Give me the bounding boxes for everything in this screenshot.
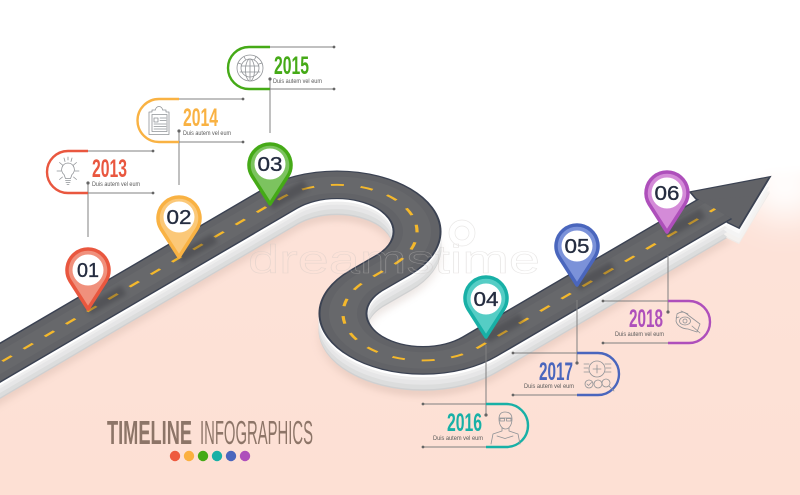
road ground shadow bbox=[0, 208, 715, 409]
label 2013: 2013 bbox=[92, 155, 127, 183]
label 2014 bbox=[138, 98, 244, 185]
icon: light bulb bbox=[57, 157, 79, 184]
pin 05: 05 bbox=[564, 236, 590, 258]
pin 03: 03 bbox=[258, 154, 282, 176]
watermark: dreamstime bbox=[248, 238, 540, 282]
pin 01: 01 bbox=[77, 260, 99, 282]
pin 04: 04 bbox=[474, 289, 498, 311]
label 2016: Duis autem vel eum bbox=[433, 436, 483, 442]
label 2018 bbox=[602, 255, 710, 344]
colour dots row bbox=[170, 451, 250, 461]
label 2013 bbox=[47, 150, 154, 237]
text: INFOGRAPHICS bbox=[200, 414, 313, 451]
label 2015 bbox=[228, 46, 335, 133]
icon: hand with eye bbox=[676, 311, 700, 333]
label 2018: 2018 bbox=[629, 305, 663, 333]
title: TIMELINE bbox=[107, 414, 192, 451]
label 2015: 2015 bbox=[274, 52, 309, 80]
icon: globe with gear bbox=[237, 55, 263, 81]
road: asphalt surface with arrow head bbox=[0, 177, 770, 386]
pin 02: 02 bbox=[166, 207, 192, 229]
road: yellow centre dashes bbox=[0, 185, 715, 386]
label 2017: Duis autem vel eum bbox=[524, 384, 574, 390]
background: white upper area bbox=[0, 0, 800, 380]
pin 05 bbox=[556, 225, 613, 286]
label 2016 bbox=[422, 345, 528, 448]
label 2016: 2016 bbox=[447, 409, 482, 437]
road: isometric side wall bbox=[0, 179, 770, 402]
pin 03 bbox=[249, 144, 306, 205]
label 2013: Duis autem vel eum bbox=[92, 182, 140, 188]
label 2017 bbox=[512, 300, 619, 396]
pin 01 bbox=[67, 249, 124, 310]
icon: person with glasses bbox=[491, 412, 520, 444]
pin 06: 06 bbox=[654, 183, 680, 205]
label 2017: 2017 bbox=[539, 358, 573, 386]
background: soft white fade by the arrow tip bbox=[745, 151, 800, 219]
pin 02 bbox=[158, 197, 215, 258]
icon: clipboard bbox=[149, 107, 169, 134]
label 2015: Duis autem vel eum bbox=[273, 79, 322, 85]
pin 06 bbox=[646, 172, 703, 233]
watermark bbox=[248, 220, 540, 282]
pin 04 bbox=[465, 277, 522, 338]
label 2014: Duis autem vel eum bbox=[183, 131, 231, 137]
icon: magnifier with plus and checks bbox=[584, 361, 614, 391]
label 2018: Duis autem vel eum bbox=[615, 332, 664, 338]
label 2014: 2014 bbox=[183, 104, 218, 132]
